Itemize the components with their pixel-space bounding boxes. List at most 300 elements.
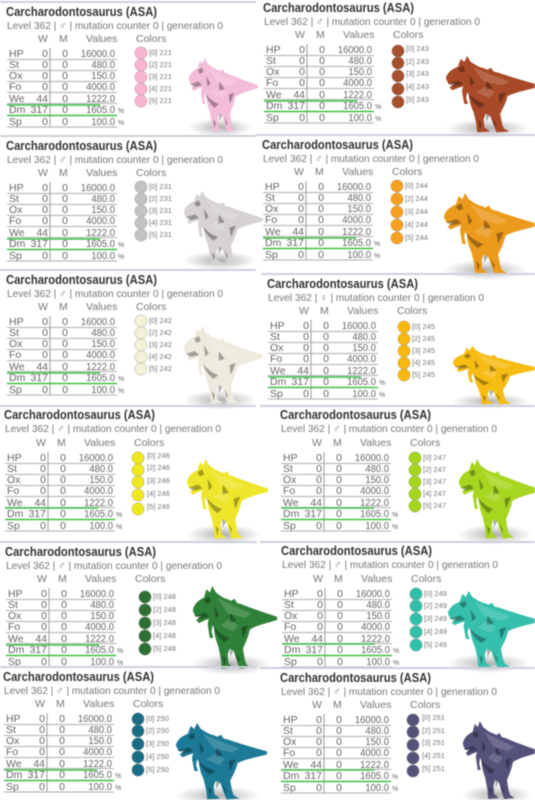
colour swatches: [0] 221: [149, 48, 172, 57]
stats table: M: [59, 301, 68, 313]
stats table: Sp: [9, 384, 22, 396]
stats table: 0: [62, 48, 68, 60]
stats table: 0: [317, 656, 323, 668]
stats table: St: [265, 192, 275, 204]
stats table: 150.0: [348, 67, 372, 78]
colour swatches: [2] 246: [147, 463, 170, 472]
colour swatches: [0] 246: [147, 451, 170, 460]
stats table: 317: [305, 644, 323, 656]
stats table: 0: [303, 320, 309, 332]
stats table: 0: [336, 497, 342, 509]
subtitle: Level 362 | ♂ | mutation counter 0 | generation 0: [5, 423, 221, 435]
colour swatches: [4] 244: [405, 220, 428, 229]
stats table: 0: [336, 782, 342, 794]
title: Carcharodontosaurus (ASA): [262, 137, 413, 152]
subtitle: Level 362 | ♂ | mutation counter 0 | generation 0: [264, 16, 480, 28]
stats table: 0: [39, 724, 45, 736]
stats table: 150.0: [91, 205, 115, 216]
stats table: 0: [42, 59, 48, 71]
stats table: 0: [42, 250, 48, 262]
stats table: M: [59, 33, 68, 45]
stats table: [7, 33, 166, 128]
stats table: %: [118, 108, 124, 115]
colour swatches: [391, 180, 428, 244]
dinosaur: yellow: [186, 459, 268, 545]
stats table: 0: [42, 316, 48, 328]
title: Carcharodontosaurus (ASA): [280, 670, 431, 685]
stats table: %: [393, 660, 399, 667]
colour swatches: [5] 245: [412, 370, 435, 379]
stats table: 4000.0: [360, 486, 389, 497]
stats table: 150.0: [91, 71, 115, 82]
stats table: 0: [39, 781, 45, 793]
stats table: 0: [316, 485, 322, 497]
colour swatches: [0] 251: [422, 713, 445, 722]
stats table: 0: [336, 463, 342, 475]
stats table: We: [9, 361, 25, 373]
colour swatches: [4] 248: [153, 631, 176, 640]
stats table: 0: [316, 747, 322, 759]
stats table: HP: [270, 320, 285, 332]
stats table: 317: [30, 372, 48, 384]
stats table: [4, 698, 163, 793]
stats table: 1222.0: [342, 227, 371, 238]
stats table: 0: [41, 588, 47, 600]
stats table: 0: [316, 520, 322, 532]
stats table: 4000.0: [85, 622, 114, 633]
colour swatches: [410, 588, 447, 651]
subtitle: Level 362 | ♂ | mutation counter 0 | generation 0: [281, 686, 497, 698]
stats table: 0: [60, 463, 66, 475]
stats table: We: [8, 633, 24, 645]
colour swatches: [3] 250: [146, 739, 169, 748]
stats table: Colors: [411, 573, 441, 585]
stats table: 44: [34, 497, 46, 509]
stats table: HP: [266, 44, 281, 56]
stats table: 0: [62, 81, 68, 93]
stats table: 1605.0: [361, 645, 390, 656]
stats table: 0: [298, 203, 304, 215]
stats table: 0: [323, 388, 329, 400]
stats table: 1222.0: [84, 498, 113, 509]
stats table: 0: [319, 44, 325, 56]
subtitle: Level 362 | ♂ | mutation counter 0 | generation 0: [263, 153, 479, 165]
colour swatches: [135, 181, 172, 241]
colour swatches: [3] 243: [406, 69, 429, 78]
stats table: W: [299, 305, 309, 317]
stats table: W: [295, 29, 305, 41]
stats table: 0: [319, 55, 325, 67]
stats table: 0: [40, 520, 46, 532]
stats table: HP: [283, 452, 298, 464]
stats table: Ox: [6, 735, 20, 747]
stats table: 4000.0: [342, 215, 371, 226]
stats table: St: [283, 725, 293, 737]
stats table: Sp: [270, 388, 283, 400]
panel: colour 243 rust: [257, 0, 535, 138]
colour swatches: [0] 249: [424, 589, 447, 598]
stats table: 0: [303, 331, 309, 343]
stats table: 100.0: [91, 385, 115, 396]
stats table: Ox: [9, 70, 23, 82]
stats table: Dm: [6, 769, 23, 781]
colour swatches: [4] 251: [422, 751, 445, 760]
stats table: 0: [303, 342, 309, 354]
stats table: 0: [62, 215, 68, 227]
stats table: 1222.0: [347, 366, 376, 377]
stats table: 0: [61, 621, 67, 633]
stats table: %: [115, 773, 121, 780]
stats table: HP: [6, 713, 21, 725]
stats table: %: [118, 254, 124, 261]
stats table: %: [379, 380, 385, 387]
panel: colour 249 teal: [260, 542, 535, 673]
stats table: 44: [35, 633, 47, 645]
stats table: We: [284, 633, 300, 645]
colour swatches: [2] 243: [406, 57, 429, 66]
stats table: M: [59, 167, 68, 179]
stats table: 16000.0: [355, 715, 389, 726]
stats table: 0: [62, 193, 68, 205]
stats table: %: [117, 660, 123, 667]
stats table: 480.0: [365, 726, 389, 737]
stats table: 0: [318, 203, 324, 215]
stats table: 16000.0: [80, 589, 114, 600]
stats table: Fo: [6, 746, 18, 758]
stats table: 16000.0: [81, 317, 115, 328]
stats table: St: [266, 55, 276, 67]
stats table: HP: [9, 316, 24, 328]
stats table: 0: [42, 327, 48, 339]
stats table: 4000.0: [347, 354, 376, 365]
colour swatches: [135, 315, 172, 375]
stats table: 0: [62, 59, 68, 71]
title: Carcharodontosaurus (ASA): [263, 0, 414, 15]
colour swatches: [409, 452, 446, 512]
stats table: Colors: [397, 305, 427, 317]
stats table: St: [9, 193, 19, 205]
stats table: 0: [61, 633, 67, 645]
stats table: We: [283, 759, 299, 771]
stats table: 0: [62, 250, 68, 262]
panel: colour 250 blue: [0, 667, 267, 800]
stats table: Colors: [136, 33, 166, 45]
stats table: St: [9, 327, 19, 339]
stats table: Dm: [265, 237, 282, 249]
stats table: 0: [336, 725, 342, 737]
stats table: 0: [318, 192, 324, 204]
stats table: %: [374, 253, 380, 260]
stats table: Sp: [283, 782, 296, 794]
stats table: M: [320, 305, 329, 317]
colour swatches: [3] 231: [149, 206, 172, 215]
stats table: M: [57, 437, 66, 449]
stats table: 0: [62, 349, 68, 361]
stats table: %: [115, 785, 121, 792]
stats table: 0: [61, 644, 67, 656]
stats table: %: [393, 648, 399, 655]
subtitle: Level 362 | ♂ | mutation counter 0 | generation 0: [7, 20, 223, 32]
stats table: 1222.0: [360, 760, 389, 771]
stats table: Sp: [265, 249, 278, 261]
title: Carcharodontosaurus (ASA): [280, 407, 431, 422]
stats table: Colors: [133, 698, 163, 710]
stats table: Dm: [270, 376, 287, 388]
stats table: 16000.0: [78, 714, 112, 725]
stats table: 0: [59, 758, 65, 770]
stats table: 1222.0: [83, 759, 112, 770]
stats table: 1222.0: [86, 362, 115, 373]
stats table: [7, 167, 166, 262]
stats table: 0: [303, 388, 309, 400]
stats table: 1605.0: [360, 509, 389, 520]
stats table: %: [117, 648, 123, 655]
colour swatches: [4] 246: [147, 489, 170, 498]
panel: colour 247 lime: [260, 406, 535, 545]
stats table: Fo: [284, 621, 296, 633]
stats table: Values: [347, 305, 378, 317]
stats table: 0: [337, 644, 343, 656]
stats table: 0: [323, 331, 329, 343]
stats table: 0: [62, 338, 68, 350]
stats table: %: [118, 376, 124, 383]
colour swatches: [2] 221: [149, 60, 172, 69]
stats table: 4000.0: [83, 747, 112, 758]
stats table: W: [312, 699, 322, 711]
stats table: Ox: [266, 66, 280, 78]
stats table: 0: [62, 227, 68, 239]
stats table: 4000.0: [360, 748, 389, 759]
stats table: Ox: [7, 474, 21, 486]
colour swatches: [0] 244: [405, 181, 428, 190]
colour swatches: [2] 247: [423, 465, 446, 474]
stats table: 0: [323, 365, 329, 377]
stats table: 0: [316, 714, 322, 726]
subtitle: Level 362 | ♂ | mutation counter 0 | generation 0: [7, 288, 223, 300]
stats table: 4000.0: [343, 78, 372, 89]
stats table: 0: [317, 610, 323, 622]
stats table: Sp: [9, 250, 22, 262]
stats table: 0: [323, 320, 329, 332]
stats table: 100.0: [88, 782, 112, 793]
stats table: Fo: [266, 77, 278, 89]
stats table: 100.0: [89, 521, 113, 532]
stats table: 0: [316, 452, 322, 464]
stats table: Sp: [283, 520, 296, 532]
stats table: 16000.0: [81, 49, 115, 60]
stats table: 44: [33, 758, 45, 770]
stats table: 0: [62, 316, 68, 328]
stats table: 1605.0: [86, 373, 115, 384]
stats table: 0: [316, 474, 322, 486]
stats table: %: [118, 120, 124, 127]
stats table: Colors: [410, 437, 440, 449]
colour swatches: [3] 242: [149, 340, 172, 349]
colour swatches: [0] 245: [412, 322, 435, 331]
stats table: 44: [36, 227, 48, 239]
stats table: 0: [59, 769, 65, 781]
stats table: 0: [337, 656, 343, 668]
stats table: 1605.0: [342, 238, 371, 249]
title: Carcharodontosaurus (ASA): [3, 669, 154, 684]
stats table: 0: [62, 104, 68, 116]
stats table: We: [265, 226, 281, 238]
stats table: 317: [30, 238, 48, 250]
stats table: W: [38, 33, 48, 45]
stats table: 0: [298, 214, 304, 226]
stats table: 0: [317, 588, 323, 600]
stats table: 317: [286, 237, 304, 249]
stats table: 100.0: [365, 521, 389, 532]
stats table: We: [266, 89, 282, 101]
stats table: 0: [62, 70, 68, 82]
colour swatches: [3] 245: [412, 346, 435, 355]
stats table: St: [284, 599, 294, 611]
stats table: Values: [360, 437, 391, 449]
colour swatches: [5] 246: [147, 502, 170, 511]
stats table: HP: [7, 452, 22, 464]
stats table: 0: [337, 610, 343, 622]
stats table: 0: [337, 633, 343, 645]
colour swatches: [4] 242: [149, 352, 172, 361]
colour swatches: [4] 231: [149, 218, 172, 227]
stats table: 44: [292, 226, 304, 238]
stats table: 1605.0: [360, 771, 389, 782]
stats table: 480.0: [352, 332, 376, 343]
stats table: %: [379, 392, 385, 399]
stats table: Dm: [9, 372, 26, 384]
stats table: %: [118, 242, 124, 249]
stats table: Fo: [283, 485, 295, 497]
stats table: Ox: [8, 610, 22, 622]
title: Carcharodontosaurus (ASA): [281, 543, 432, 558]
colour swatches: [4] 243: [406, 82, 429, 91]
stats table: 0: [61, 610, 67, 622]
stats table: 150.0: [347, 204, 371, 215]
subtitle: Level 362 | ♀ | mutation counter 0 | generation 0: [268, 292, 484, 304]
colour swatches: [0] 242: [149, 316, 172, 325]
stats table: Fo: [283, 747, 295, 759]
stats table: 317: [27, 769, 45, 781]
stats table: Colors: [393, 29, 423, 41]
stats table: 0: [62, 182, 68, 194]
colour swatches: [2] 244: [405, 194, 428, 203]
stats table: 0: [299, 112, 305, 124]
stats table: St: [7, 463, 17, 475]
panel: colour 221 pink: [0, 2, 258, 137]
stats table: 0: [303, 353, 309, 365]
stats table: 0: [298, 249, 304, 261]
stats table: 0: [59, 735, 65, 747]
stats table: 480.0: [366, 600, 390, 611]
stats table: 0: [318, 181, 324, 193]
dinosaur: green: [192, 586, 277, 675]
stats table: 0: [319, 89, 325, 101]
stats table: We: [270, 365, 286, 377]
colour swatches: [4] 247: [423, 489, 446, 498]
colour swatches: [132, 451, 170, 515]
stats table: 0: [41, 621, 47, 633]
stats table: 16000.0: [356, 589, 390, 600]
stats table: 0: [42, 384, 48, 396]
stats table: 480.0: [365, 464, 389, 475]
stats table: M: [58, 573, 67, 585]
dinosaur: orange: [443, 193, 535, 280]
stats table: St: [9, 59, 19, 71]
stats table: 150.0: [365, 737, 389, 748]
stats table: 0: [337, 588, 343, 600]
stats table: 0: [62, 204, 68, 216]
stats table: Colors: [136, 301, 166, 313]
stats table: Ox: [9, 204, 23, 216]
panel: colour 251 slate: [260, 668, 535, 800]
colour swatches: [5] 251: [422, 764, 445, 773]
stats table: Colors: [135, 573, 165, 585]
stats table: Fo: [9, 349, 21, 361]
stats table: 0: [299, 55, 305, 67]
stats table: 44: [36, 93, 48, 105]
colour swatches: [3] 248: [153, 618, 176, 627]
stats table: [264, 29, 423, 124]
stats table: Values: [83, 698, 114, 710]
stats table: 0: [40, 463, 46, 475]
stats table: 150.0: [89, 475, 113, 486]
stats table: 150.0: [91, 339, 115, 350]
panel: colour 246 yellow: [0, 406, 268, 545]
dinosaur: gold: [452, 346, 535, 409]
colour swatches: [3] 247: [423, 477, 446, 486]
stats table: Ox: [9, 338, 23, 350]
stats table: Fo: [9, 215, 21, 227]
stats table: 4000.0: [86, 216, 115, 227]
stats table: 0: [336, 452, 342, 464]
stats table: 0: [62, 361, 68, 373]
colour swatches: [2] 251: [422, 726, 445, 735]
stats table: St: [6, 724, 16, 736]
stats table: 44: [297, 365, 309, 377]
stats table: 0: [62, 327, 68, 339]
stats table: 4000.0: [361, 622, 390, 633]
stats table: %: [116, 512, 122, 519]
stats table: 0: [316, 782, 322, 794]
title: Carcharodontosaurus (ASA): [6, 272, 157, 287]
stats table: 480.0: [91, 194, 115, 205]
stats table: We: [283, 497, 299, 509]
dinosaur: rust: [445, 56, 535, 138]
stats table: 480.0: [347, 193, 371, 204]
stats table: 0: [42, 48, 48, 60]
stats table: 0: [336, 714, 342, 726]
stats table: HP: [265, 181, 280, 193]
colour swatches: [5] 250: [146, 765, 169, 774]
stats table: W: [38, 167, 48, 179]
stats table: Colors: [410, 699, 440, 711]
stats table: 0: [42, 116, 48, 128]
panel: colour 248 green: [0, 542, 277, 675]
stats table: HP: [9, 182, 24, 194]
panel: colour 231 grey: [0, 136, 263, 270]
stats table: 317: [28, 508, 46, 520]
colour swatches: [4] 221: [149, 84, 172, 93]
colour swatches: [398, 321, 435, 381]
colour swatches: [2] 242: [149, 328, 172, 337]
colour swatches: [0] 243: [406, 44, 429, 53]
dinosaur: grey: [183, 191, 263, 270]
stats table: 0: [318, 237, 324, 249]
stats table: 150.0: [352, 343, 376, 354]
stats table: 4000.0: [86, 82, 115, 93]
stats table: 0: [40, 452, 46, 464]
